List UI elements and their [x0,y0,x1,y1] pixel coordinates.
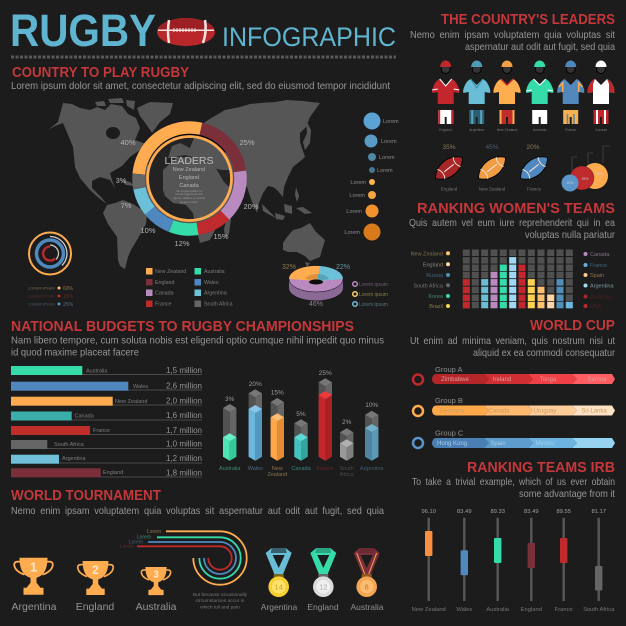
bar: New Zealand: New [272,466,283,472]
text block: IRB [412,476,615,500]
horizontal bar chart: 1,6 million [166,411,202,420]
trophy: England: 2 [92,563,99,577]
medal: Argentina: 14 [275,582,283,592]
horizontal bar chart [11,366,202,478]
legend: left [411,251,450,310]
group A: Zimbabwe [441,377,469,383]
jersey: New Zealand [494,60,520,132]
horizontal bar chart: New Zealand [115,399,147,405]
legend: left: Russia [426,273,444,279]
bubble scale: Lorem [379,155,395,161]
panel: world tournament [11,488,384,613]
icon: rugby ball [157,18,215,46]
bar: South Africa [340,419,355,478]
horizontal bar chart: Canada [74,414,95,420]
horizontal bar chart: France [93,428,110,434]
range chart: 83.49 [457,509,472,515]
radial arc chart: circumstances occur in [196,598,245,604]
horizontal bar chart: 2,0 million [166,396,202,406]
horizontal bar chart: 1,2 million [166,454,202,463]
rugby ball: New Zealand 45%: New Zealand [479,186,506,192]
venn bubble chart: 25% [581,177,589,181]
heading: ranking women's teams: RANKING WOMEN'S TEAMS [417,201,615,217]
group C: Hong Kong [437,441,467,447]
trophy: Australia: Australia [136,601,177,613]
group A: Samoa [587,377,607,383]
jersey: France: France [565,128,576,132]
horizontal bar chart: 2,6 million [166,382,202,390]
radial arc chart: Lorem [137,534,151,540]
panel: country to play rugby [11,65,399,308]
text block: intro: Lorem ipsum dolor sit amet, consectetur adipiscing elit, sed do eiusmod tempor incididunt [11,80,390,92]
legend: right: France [590,263,607,269]
panel: the country's leaders [410,12,615,192]
bar: Canada [291,411,312,472]
donut chart: leaders [132,121,247,236]
group B: Sri Lanka [581,408,607,414]
group C [413,428,615,448]
horizontal bar chart: Australia [86,368,108,374]
jersey: Argentina: Argentina [469,128,484,132]
bar: Canada: Canada [291,466,312,472]
legend: left: Korea [428,294,444,300]
bar: South Africa: Africa [340,472,355,478]
legend: countries: New Zealand [155,269,186,275]
bubble scale: Lorem [377,168,393,174]
horizontal bar chart: South Africa [54,442,85,448]
bubble scale: Lorem [381,139,397,145]
group A: Group A [435,365,463,374]
heading: ranking teams IRB: RANKING TEAMS IRB [467,460,615,476]
legend: right: Australia [590,294,612,300]
legend: right: Spain [590,273,604,279]
donut chart: leaders: the master-builder of [176,189,202,193]
range chart: Australia [486,607,510,613]
group C: Mexico [535,441,555,447]
legend: countries: Argentina [204,290,227,296]
rugby ball: New Zealand 45%: 45% [485,144,499,151]
group C: Group C [435,428,464,438]
donut percentage labels: 15% [213,232,229,241]
rugby ball: France 20% [516,144,552,192]
bar: Argentina: Argentina [360,466,384,472]
bar: New Zealand: Zealand [267,472,287,478]
medal: Australia: 8 [365,582,369,592]
trophy: Australia: 3 [153,570,159,581]
radial chart: LOREM IPSUM [28,302,55,306]
bar: Canada: 5% [296,411,306,418]
group A: Tonga [540,377,557,383]
range chart: 83.49 [524,509,539,515]
donut percentage labels: 10% [140,226,156,235]
donut chart: leaders: Canada [179,183,200,189]
3d pie chart: Lorem ipsum [359,282,388,288]
radial chart: 15% [63,294,74,300]
radial arc chart: which toil and pain [200,604,240,610]
group A [413,365,615,384]
range chart: Wales [456,607,472,613]
donut percentage labels: 12% [174,239,190,248]
range chart [412,509,615,613]
jersey: New Zealand: New Zealand [497,128,517,132]
horizontal bar chart: 1,0 million [166,440,202,448]
jersey: Australia [526,60,553,132]
legend: left: England [423,262,443,268]
legend: countries: Australia [204,269,225,275]
trophy: England [76,561,114,613]
panel: world cup [410,318,615,448]
legend: countries: England [155,280,174,286]
legend: right [584,252,614,310]
group C: Spain [490,441,506,447]
bar: Australia: Australia [219,466,241,472]
donut percentage labels: 20% [243,202,259,211]
horizontal bar chart: 1,7 million [166,426,202,435]
legend: countries: France [155,302,172,308]
legend: countries [146,268,233,308]
panel: ranking women's teams [409,201,615,310]
legend: left: Brazil [429,304,443,310]
bar: Wales [248,381,263,472]
bubble scale: Lorem [346,209,362,215]
bubble scale: Lorem [383,119,399,125]
range chart: 89.33 [490,509,505,515]
horizontal bar chart: Wales [133,384,148,390]
heading: the country's leaders: THE COUNTRY'S LEADERS [441,12,615,28]
radial chart: 25% [63,302,74,308]
3d pie chart [282,264,388,308]
trophy: Argentina: Argentina [12,601,57,613]
3d pie chart: 22% [336,264,350,271]
3d pie chart: Lorem ipsum [359,302,388,308]
title [10,5,396,56]
bubble scale [344,112,399,240]
radial chart [28,232,74,308]
3d pie chart: 46% [309,301,323,308]
donut percentage labels: 7% [121,201,132,210]
radial chart: 60% [63,286,74,292]
radial chart: LOREM IPSUM [28,294,55,298]
rugby ball: England 35%: 35% [442,144,456,151]
venn bubble chart [562,146,610,192]
group A: Ireland [493,377,511,383]
jersey: England [432,60,459,132]
panel: ranking teams IRB [412,460,615,613]
radial arc chart: But because occasionally [193,592,248,598]
3d pie chart: Lorem ipsum [359,292,388,298]
donut percentage labels [116,138,259,248]
group B: Uruguay [534,408,556,414]
range chart: 81.17 [591,509,606,515]
text block: women's teams [409,217,615,241]
bubble scale: Lorem [344,230,360,236]
donut chart: leaders: England [179,175,199,181]
rugby ball: France 20%: 20% [526,144,540,151]
pictogram grid chart [463,250,573,308]
text block: budgets [11,334,384,358]
rugby ball: France 20%: France [527,186,541,192]
bar: South Africa: South [340,466,354,472]
range chart: 96.10 [421,509,436,515]
range chart: South Africa [583,607,615,613]
text block: leaders [410,29,615,53]
rugby ball: England 35% [431,144,467,192]
donut percentage labels: 25% [239,138,255,147]
horizontal bar chart: Argentina [62,456,86,462]
bubble scale: Lorem [350,180,366,186]
bar: France [317,370,334,472]
medal: England [307,548,339,612]
panel: national budgets [11,319,384,478]
text block: budgets: id quod maxime placeat facere [11,346,139,358]
bar: France: France [317,466,334,472]
title: INFOGRAPHIC [222,22,396,52]
medal: England: 12 [319,582,327,592]
rugby ball: New Zealand 45% [474,144,510,192]
bar: Argentina: 10% [365,402,378,409]
horizontal bar chart: England [103,470,123,476]
donut chart: leaders: LEADERS [164,155,214,167]
bar: Wales: 20% [249,381,262,388]
bar: South Africa: 2% [342,419,352,426]
legend: right: Argentina [590,284,614,290]
donut chart: leaders: New Zealand [173,167,205,173]
bar: New Zealand: 15% [271,390,284,396]
trophy: Australia [136,567,177,613]
medal: Australia: Australia [350,602,384,612]
bar: Australia: 3% [225,396,235,403]
donut chart: leaders: rejects, dislikes, or avoids [173,196,206,200]
radial arc chart: Lorem [129,540,143,546]
radial arc chart: Lorem [147,529,161,535]
range chart: 89.55 [556,509,571,515]
legend: countries: Wales [204,280,219,286]
heading: country to play rugby: COUNTRY TO PLAY RUGBY [12,65,189,81]
medal: Australia [350,548,384,612]
heading: world tournament: WORLD TOURNAMENT [11,488,161,504]
text block: world cup [410,335,615,359]
trophy: Argentina [12,558,57,613]
legend: left: South Africa [413,283,444,289]
legend: right: Canada [590,252,610,258]
title: RUGBY [10,5,156,56]
donut percentage labels: 40% [120,138,136,147]
range chart: New Zealand [412,607,446,613]
range chart: France [555,607,573,613]
heading: national budgets: NATIONAL BUDGETS TO RUGBY CHAMPIONSHIPS [11,319,354,335]
jersey: Canada [588,60,614,132]
trophy: England: England [76,601,114,613]
jersey: Australia: Australia [533,128,547,132]
horizontal bar chart: 1,8 million [166,468,202,478]
medal: England: England [307,602,339,612]
medal: Argentina: Argentina [261,602,297,612]
legend: countries: Canada [155,290,174,296]
radial arc chart [120,529,248,610]
3d pie chart: 32% [282,264,296,271]
bar: Wales: Wales [248,466,263,472]
jersey: France [557,60,584,132]
legend: right: USA [590,304,602,310]
text block: tournament: Nemo enim ipsam voluptatem quia voluptas sit aspernatur aut odit aut fugit, sed quia [11,505,384,517]
donut chart: leaders: pleasure itself. [180,200,198,204]
jersey: Canada: Canada [595,128,607,132]
3d bar chart [219,370,384,478]
venn bubble chart: 20% [566,181,574,185]
group B: Canada [488,408,510,414]
bubble scale: Lorem [349,193,365,199]
jersey: Argentina [463,60,490,132]
venn bubble chart: 55% [595,172,603,176]
group B [413,396,615,416]
range chart: England [521,607,542,613]
text block: IRB: some advantage from it [519,488,615,500]
trophy: Argentina: 1 [30,560,37,575]
world map [48,98,325,269]
jersey: England: England [439,128,452,132]
bar: New Zealand [267,390,287,478]
rugby ball: England 35%: England [441,186,458,192]
heading: world cup: WORLD CUP [530,318,615,334]
bar: Argentina [360,402,384,472]
donut chart: leaders: human happiness one [175,192,203,196]
radial chart: LOREM IPSUM [28,286,55,290]
group B: Germany [440,408,464,414]
legend: left: New Zealand [411,251,443,257]
bar: Australia [219,396,241,472]
legend: countries: South Africa [204,302,233,308]
radial arc chart: Lorem [120,544,134,550]
horizontal bar chart: 1,5 million [166,366,202,375]
text block: budgets: Nam libero tempore, cum soluta nobis est eligendi optio cumque nihil impedit quo minus [11,334,384,346]
group C: South Korea [579,441,613,447]
group B: Group B [435,396,463,405]
bar: France: 25% [319,370,332,377]
medal: Argentina [261,548,297,612]
donut percentage labels: 3% [116,176,127,185]
text block: women's teams: voluptas nulla pariatur [525,229,615,241]
